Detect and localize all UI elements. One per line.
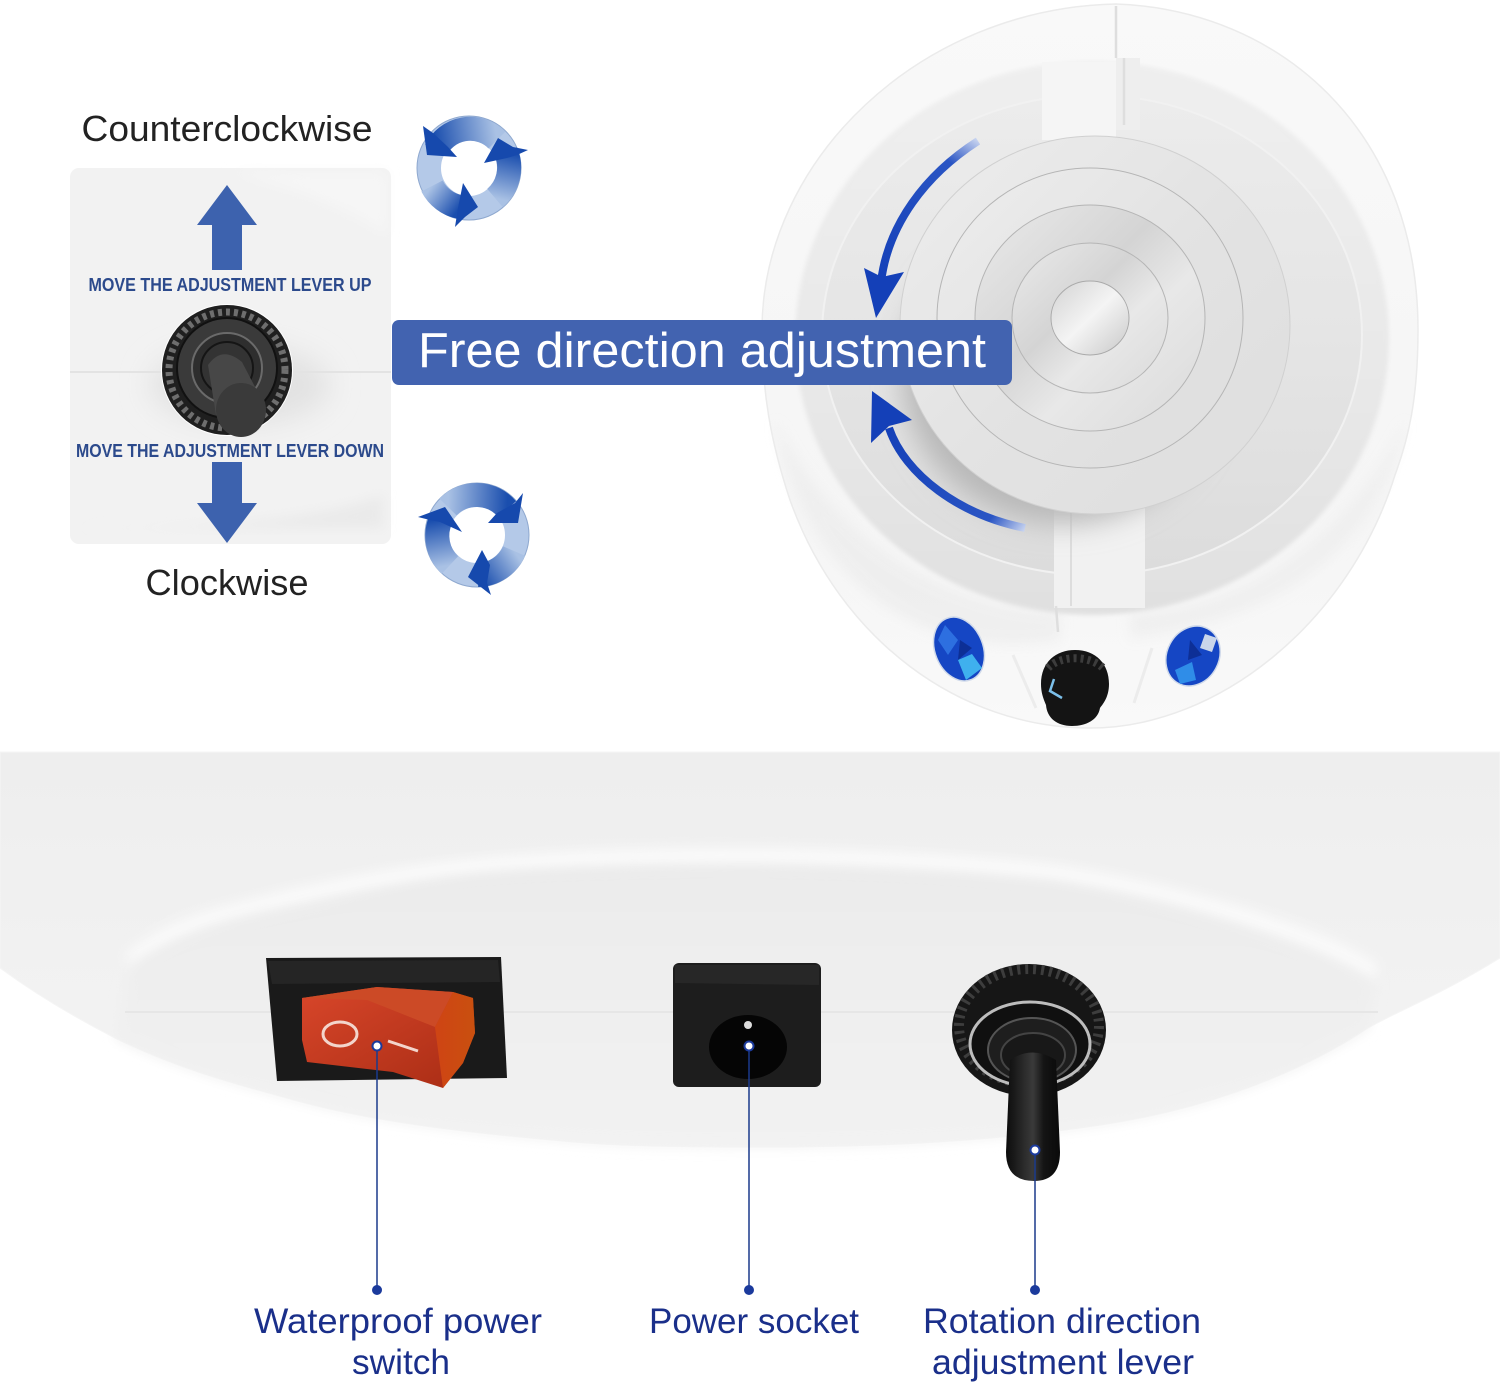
arrow: up (197, 185, 257, 270)
icon: toggle lever (161, 304, 293, 437)
control knob (1041, 650, 1109, 726)
label: clockwise: Clockwise (146, 562, 308, 603)
product: wheel base side view (0, 752, 1500, 1147)
callout: rotation lever: adjustment lever (932, 1343, 1194, 1382)
label: lever up: MOVE THE ADJUSTMENT LEVER UP (88, 274, 372, 295)
label: lever down: MOVE THE ADJUSTMENT LEVER DOWN (76, 440, 384, 461)
icon: clockwise cycle (418, 483, 529, 595)
callout: power switch: Waterproof power (254, 1302, 542, 1341)
toggle lever (952, 964, 1106, 1181)
callout: rotation lever (923, 1146, 1201, 1382)
turntable platter (900, 136, 1290, 514)
gem indicator left (924, 609, 994, 689)
rotation arrows on wheel (864, 141, 1025, 528)
callout: power switch (254, 1042, 542, 1382)
product: pottery wheel top view (762, 4, 1418, 728)
callout: power socket: Power socket (649, 1302, 859, 1341)
icon: counterclockwise cycle (417, 116, 528, 227)
arrow: down (197, 462, 257, 543)
callout: rotation lever: Rotation direction (923, 1302, 1201, 1341)
rocker switch (266, 957, 507, 1088)
gem indicator right (1155, 616, 1231, 696)
label: counterclockwise: Counterclockwise (82, 108, 372, 149)
callout: power switch: switch (352, 1343, 450, 1382)
panel: lever directions (70, 168, 391, 544)
banner: free direction adjustment: Free direction adjustment (418, 324, 986, 378)
callout: power socket (649, 1042, 859, 1341)
power socket (673, 963, 821, 1087)
